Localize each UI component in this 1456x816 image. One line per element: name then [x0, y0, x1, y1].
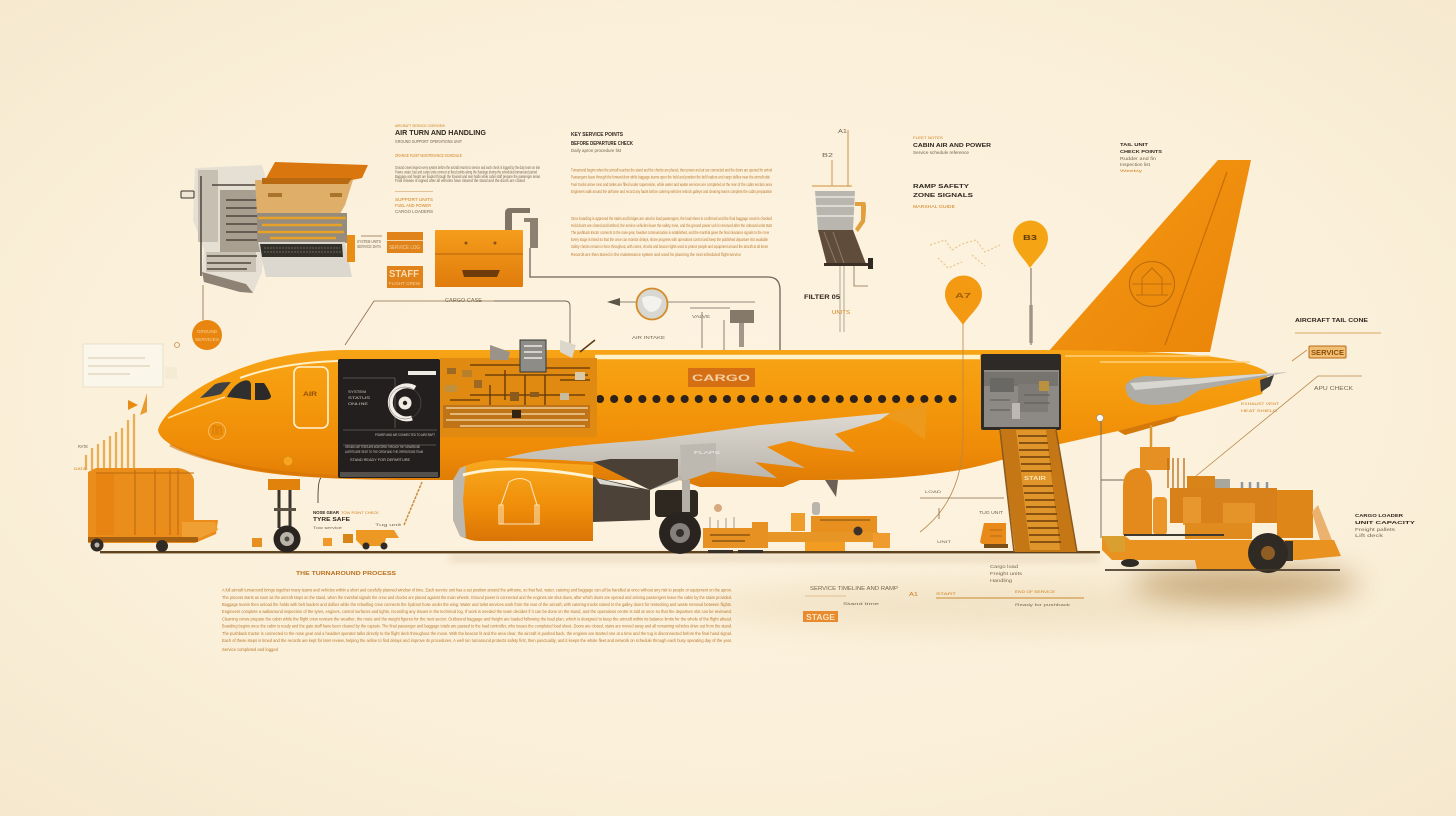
text block: top left: Power, water, fuel and cargo units connect at fixed points along the fuselage during the scheduled turnaround period — [395, 170, 537, 174]
panel: circuit cutaway — [440, 340, 597, 437]
connector lines: top — [345, 248, 780, 358]
panel: black info screen: GROUND UNIT FEEDS ARE MONITORED THROUGH THE TURNAROUND — [345, 444, 420, 449]
labels: small orange tags — [387, 232, 423, 288]
labels: small orange tags: STAFF — [389, 269, 419, 280]
icon: filter canister: FILTER 05 — [804, 295, 841, 301]
label: nose gear notes: NOSE GEAR — [313, 510, 340, 515]
legend: lower centre: Ready for pushback — [1015, 602, 1070, 607]
balloon pin: left: A7 — [955, 293, 971, 300]
panel: black info screen: ONLINE — [348, 401, 368, 406]
text block: centre columns: Once boarding is approved the stairs and bridges are used to load passengers, the load sheet is confirmed and the final baggage count is checked — [571, 216, 772, 222]
legend: lower centre: SERVICE TIMELINE AND RAMP — [810, 586, 899, 592]
label: nose gear notes: Tug unit — [375, 523, 403, 527]
text block: bottom paragraph: Service completed and logged — [222, 647, 278, 653]
vehicle: baggage cart left — [88, 468, 218, 552]
callouts: right side — [1196, 318, 1415, 538]
callout: laptop connector — [357, 236, 382, 249]
text block: upper right: RAMP SAFETY — [913, 184, 969, 190]
icon: filter canister: A1 — [838, 129, 847, 135]
label: nose gear notes: Tow service — [313, 526, 342, 530]
ground shadow — [450, 555, 1360, 632]
vehicle: central service equipment — [703, 502, 890, 553]
text block: centre columns: Fuel trucks arrive next and tanks are filled under supervision, while water and waste services are completed at the rear of the cabin section area — [571, 182, 772, 188]
text block: centre columns: Records are then stored in the maintenance system and used for planning the next scheduled flight service — [571, 252, 741, 258]
circle badge: GROUND — [197, 329, 218, 334]
text block: bottom paragraph: The pushback tractor is connected to the nose gear and a headset operator talks directly to the flight deck throughout the move. With the beacon lit and the area clear, the aircraft is pushed back, the engines are started one at a time and the tug is disconnected before the final hand signal. — [222, 631, 732, 637]
text block: centre columns: Safety checks remain in force throughout, with cones, chocks and beacon lights used to protect people and equipment around the aircraft at all times — [571, 244, 768, 250]
text block: upper right: Weekly — [1120, 168, 1142, 173]
text block: bottom paragraph: Each of these steps is timed and the records are kept for later review, helping the airline to find delays and improve its procedures. A well run turnaround protects safety first, then punctuality, and it keeps the whole fleet and network on schedule through each busy operating day of the year. — [222, 638, 732, 644]
panel: black info screen: ALERTS ARE SENT TO THE CREW AND THE OPERATIONS TEAM — [345, 449, 423, 454]
boarding stairs: STAIR — [1024, 476, 1047, 482]
panel: black info screen: STAND READY FOR DEPARTURE — [350, 457, 410, 462]
text block: centre columns: Hold doors are closed and latched, the service vehicles leave the safety zone, and the ground power unit is removed after the onboard units start — [571, 223, 772, 229]
fuselage label — [688, 368, 755, 387]
circle badge: SERVICES — [195, 337, 219, 342]
label: nose gear notes: TYRE SAFE — [313, 517, 351, 523]
text block: centre columns: Turnaround begins when the aircraft reaches the stand and the chocks are placed, then power and air are connected and the doors are opened for arrival — [571, 168, 772, 174]
boarding stairs — [1000, 429, 1077, 552]
callouts: right side: CARGO LOADER — [1355, 513, 1404, 518]
small ground boxes and cart — [252, 478, 422, 550]
callouts: right side: AIRCRAFT TAIL CONE — [1295, 318, 1369, 324]
legend: lower centre: A1 — [909, 592, 918, 598]
text block: centre columns: BEFORE DEPARTURE CHECK — [571, 141, 633, 147]
text block: bottom paragraph: Engineers complete a walkaround inspection of the tyres, engines, control surfaces and lights, recording any issues in the technical log. If work is needed the team decides if it can be done on the stand, and the operations centre is told at once so that the departure slot can be reviewed. — [222, 609, 732, 615]
callouts: right side: Lift deck — [1355, 533, 1384, 538]
text block: top left: AIR TURN AND HANDLING — [395, 130, 487, 137]
text block: bottom paragraph: Cleaning crews prepare the cabin while the flight crew reviews the weather, the route and the weight figures for the next sector. Outbound baggage and freight are loaded following the load plan, which is designed to keep the aircraft within its balance limits for the whole of the flight ahead. — [222, 616, 732, 622]
text block: centre columns: Daily apron procedure list — [571, 148, 622, 153]
icon: filter canister — [804, 129, 873, 332]
legend: lower centre: Cargo load — [990, 564, 1019, 569]
icon: inspection lens — [607, 288, 755, 320]
text block: upper right: ZONE SIGNALS — [913, 193, 973, 199]
engine — [453, 460, 650, 541]
text block: upper right: Rudder and fin — [1120, 156, 1157, 161]
text block: bottom paragraph: The process starts as soon as the aircraft stops on the stand, when the marshal signals the crew and chocks are placed against the main wheels. Ground power is connected and the engines are shut down, after which doors are opened and arriving passengers leave the cabin by the stairs provided. — [222, 595, 732, 601]
text block: upper right: CHECK POINTS — [1120, 149, 1162, 154]
labels: small orange tags: FLIGHT CREW — [389, 281, 421, 286]
vehicle: small tug near stairs: LOAD — [925, 489, 941, 494]
balloon pin: right — [1013, 220, 1048, 345]
vehicle: cargo truck right — [1096, 414, 1341, 573]
left info card — [83, 342, 180, 387]
main landing gear — [655, 480, 701, 554]
icon: small valve device: VALVE — [692, 314, 710, 319]
legend: lower centre: START — [936, 591, 957, 596]
map dots graphic — [930, 240, 1000, 268]
text block: centre columns: Passengers leave through the forward door while baggage teams open the hold and position the belt loaders and cargo dollies near the aircraft side — [571, 174, 770, 180]
horizontal stabilizer — [1118, 372, 1288, 435]
text block: bottom paragraph: THE TURNAROUND PROCESS — [296, 571, 396, 577]
legend: lower centre: Freight units — [990, 571, 1023, 576]
callouts: right side: SERVICE — [1311, 350, 1344, 357]
text block: upper right: MARSHAL GUIDE — [913, 204, 955, 209]
panel: black info screen: POWER AND AIR CONNECTED TO AIRCRAFT — [375, 432, 435, 437]
text block: centre columns: The pushback tractor connects to the nose gear, headset communication is established, and the marshal gives the final clearance signals to the crew — [571, 230, 769, 236]
forward door: AIR — [303, 392, 318, 398]
text block: top left: FUEL AND POWER — [395, 203, 432, 208]
text block: top left: CARGO LOADERS — [395, 209, 433, 214]
callouts: right side: APU CHECK — [1314, 386, 1354, 392]
forward door — [294, 367, 328, 428]
cockpit windows — [200, 380, 271, 400]
text block: bottom paragraph: Baggage teams then unload the holds with belt loaders and dollies while the refuelling crew connects the hydrant hose under the wing. Water and toilet services work from the rear of the aircraft, with catering trucks raised to the galley doors for restocking and waste removal between flights. — [222, 602, 732, 608]
panel: rear cargo door cutaway — [981, 354, 1061, 430]
icon: filter canister: UNITS — [832, 310, 851, 316]
legend: lower centre: Handling — [990, 578, 1013, 583]
text block: top left — [395, 123, 540, 214]
text block: top left: ORANGE FLEET MAINTENANCE SCHEDULE — [395, 153, 462, 158]
label: nose gear notes: TOW POINT CHECK — [341, 511, 380, 515]
text block: top left: GROUND SUPPORT OPERATIONS UNIT — [395, 139, 462, 144]
fuselage — [158, 350, 1268, 487]
panel: black info screen — [338, 359, 440, 478]
panel: black info screen: STATUS — [348, 395, 370, 400]
cabin windows — [600, 395, 956, 403]
text block: upper right: FLEET NOTES — [913, 136, 944, 140]
legend: lower centre: END OF SERVICE — [1015, 589, 1055, 594]
text block: centre columns — [571, 132, 772, 258]
text block: upper right — [913, 136, 1162, 209]
text block: centre columns: Engineers walk around the airframe and record any faults before catering vehicles restock galleys and cleaning teams complete the cabin preparation — [571, 189, 772, 195]
callout: laptop connector: SYSTEM UNITS — [357, 239, 381, 244]
balloon pin: left — [920, 276, 982, 532]
text block: upper right: TAIL UNIT — [1120, 142, 1148, 147]
circle badge — [192, 285, 222, 350]
donut chart — [389, 386, 421, 419]
label: nose gear notes — [313, 510, 403, 530]
nose emblem — [208, 422, 293, 466]
ground line — [100, 551, 1100, 553]
vehicle: small tug near stairs: UNIT — [937, 539, 952, 544]
icon: laptop service module — [181, 162, 368, 293]
balloon pin: right: B3 — [1023, 235, 1037, 242]
wing: FLAPS — [694, 450, 720, 455]
callouts: right side: EXHAUST VENT — [1241, 401, 1280, 406]
text block: bottom paragraph: Boarding begins once the cabin is ready and the gate staff have been cleared by the captain. The final passenger and baggage totals are passed to the load controller, who issues the completed load sheet. Doors are closed, stairs are moved away and all remaining vehicles drive out from the stand. — [222, 624, 732, 630]
legend: lower centre — [803, 564, 1084, 622]
text block: centre columns: KEY SERVICE POINTS — [571, 132, 623, 138]
text block: top left: Baggage and freight are loaded through the forward and rear holds while cabin staff prepare the passenger areas — [395, 174, 540, 179]
callouts: right side: Freight pallets — [1355, 527, 1396, 532]
icon: small valve device — [632, 308, 754, 350]
icon: orange case with pipe: CARGO CASE — [445, 298, 483, 304]
bar chart with flags: DATA — [74, 466, 86, 471]
text block: top left: Ground crews inspect every system before the aircraft returns to service and each check is logged by the duty team on site — [395, 165, 540, 170]
vehicle: small tug near stairs — [920, 489, 1008, 548]
ventral fin — [825, 480, 838, 497]
icon: small valve device: AIR INTAKE — [632, 335, 665, 340]
legend: lower centre: Stand time — [843, 601, 880, 606]
vehicle: small tug near stairs: TUG UNIT — [979, 510, 1003, 515]
wing — [505, 413, 890, 490]
text block: top left: Final release is signed after all vehicles have cleared the stand and the doors are closed — [395, 178, 525, 183]
tail fin — [1048, 160, 1251, 352]
text block: upper right: CABIN AIR AND POWER — [913, 143, 992, 149]
text block: bottom paragraph — [222, 571, 732, 653]
text block: centre columns: Every stage is timed so that the crew can monitor delays, share progress with operations control and keep the published departure slot available — [571, 237, 768, 243]
bar chart with flags — [74, 393, 147, 471]
text block: upper right: Inspection list — [1120, 162, 1151, 167]
icon: orange case with pipe — [435, 208, 538, 304]
text block: bottom paragraph: A full aircraft turnaround brings together many teams and vehicles within a short and carefully planned window of time. Each service unit has a set position around the airframe, so that fuel, water, catering and baggage can all be handled at once without any risk to people or equipment on the apron. — [222, 588, 732, 594]
panel: black info screen: SYSTEM — [348, 389, 366, 394]
text block: top left: AIRCRAFT SERVICE OVERVIEW — [395, 123, 445, 128]
callouts: right side: HEAT SHIELD — [1241, 408, 1277, 413]
labels: small orange tags: SERVICE LOG — [389, 245, 420, 251]
bar chart with flags: RATE — [78, 444, 88, 449]
icon: filter canister: B2 — [822, 153, 833, 159]
winglet — [882, 402, 927, 440]
legend: lower centre: STAGE — [806, 613, 836, 622]
fuselage label: CARGO — [692, 373, 750, 383]
text block: top left: SUPPORT UNITS — [395, 197, 433, 202]
nose landing gear — [268, 479, 300, 552]
text block: upper right: Service schedule reference — [913, 150, 969, 155]
callouts: right side: UNIT CAPACITY — [1355, 520, 1415, 525]
callout: laptop connector: SERVICE DATA — [357, 244, 382, 249]
